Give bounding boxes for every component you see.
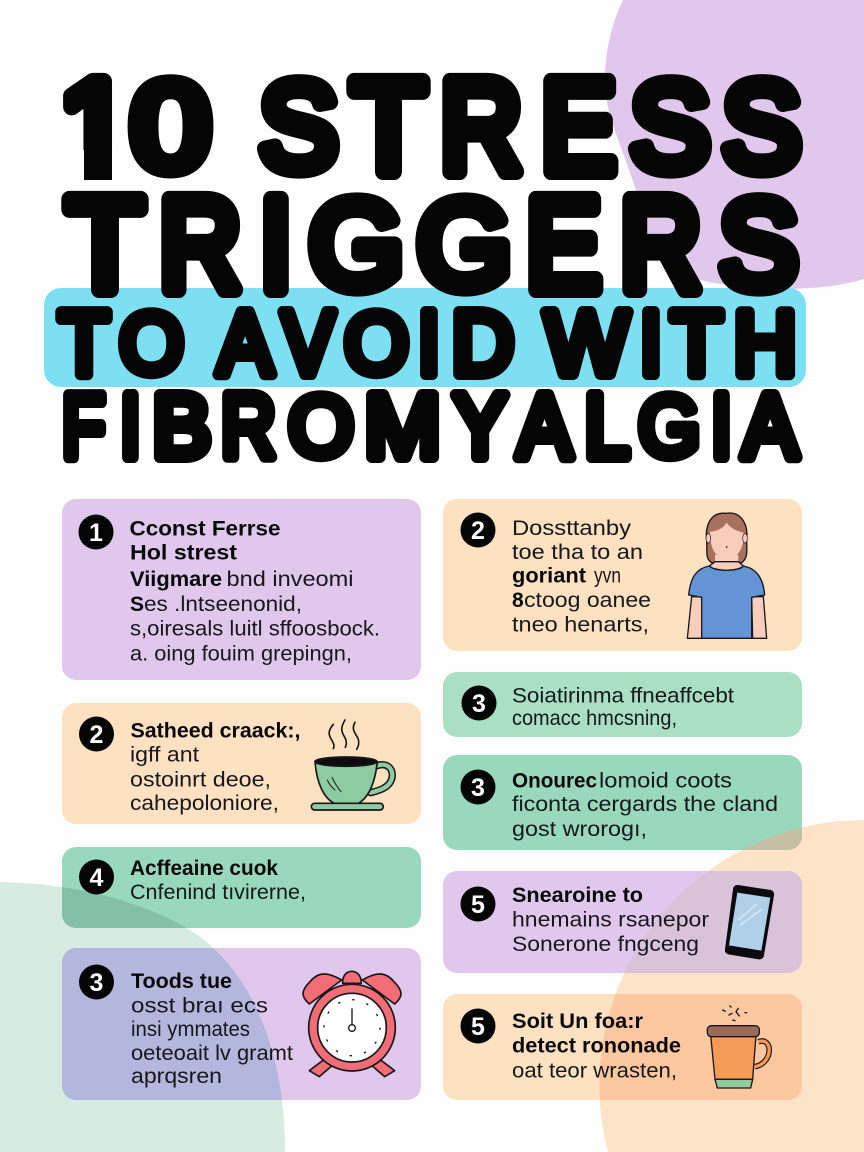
icon: steaming cup [311,720,392,810]
card 1 text: S [130,593,144,616]
number badge 3: 3 [90,969,103,997]
number badge 1: 1 [89,519,103,547]
title line 2: I [260,172,292,318]
card 2 text: Satheed craack:, [130,720,300,742]
number badge 5: 5 [471,1013,485,1041]
card 5 text: Dossttanby [512,517,632,540]
panel: card 9 peach with mug [443,994,802,1100]
title line 3: O [344,295,409,391]
title line 3: T [671,293,722,394]
number badge 4: 4 [90,864,104,892]
number badge 3 [462,686,496,720]
panel: card 2 peach with cup [62,703,421,824]
panel: card 8 purple with phone [443,871,802,973]
number badge 2 [79,716,114,752]
title line 3: I [418,292,440,393]
card 8 text: Sonerone fngceng [512,933,699,956]
card 4 text: insi ymmates [131,1018,250,1041]
title line 1: S [630,57,710,196]
card 6 text [512,684,734,730]
card 1 text [130,518,380,666]
number badge 1 [78,514,114,550]
card 5 text: tneo henarts, [512,614,649,636]
card 9 text: Soit Un foa:r [512,1010,643,1033]
title line 3: I [640,292,662,393]
panel: card 6 light green [443,672,802,737]
number badge 5: 5 [471,891,485,919]
icon: orange mug [707,1006,769,1088]
title line 4: F [62,377,105,477]
title line 4: O [288,378,354,474]
title line 3: H [734,292,796,393]
card 8 text [512,884,709,956]
card 5 text [512,517,651,636]
panel: card 4 purple with clock [62,948,421,1100]
title line 1: 0 [131,57,210,196]
card 3 text [130,857,306,904]
card 1 text: Cconst Ferrse [130,518,280,540]
card 4 text [131,970,293,1088]
number badge 3 [460,770,496,804]
card 8 text: Snearoine to [512,884,643,907]
panel: card 5 peach with person [443,499,802,651]
background blob: green bottom left [0,882,285,1152]
title line 4: L [585,377,629,477]
card 6 text: comacc hmcsning, [512,707,677,730]
icon: smartphone [725,885,774,959]
title line 2: E [526,171,601,317]
card 4 text: osst braı ecs [131,994,268,1018]
title line 3 [59,292,796,394]
card 7 text [512,770,778,841]
card 7 text: lomoid coots [599,770,732,792]
title line 1: S [722,56,801,196]
title line 4: I [711,376,732,477]
card 5 text: ctoog oanee [524,589,651,612]
title line 4: B [153,376,211,476]
card 7 text: gost wrorogı, [512,818,647,841]
title line 3: O [119,295,184,391]
title [44,52,806,477]
title line 3: W [545,292,628,393]
title line 3: V [282,293,334,393]
title line 1: 1 [59,52,132,200]
background blob: peach bottom right [599,820,864,1152]
title line 4: G [638,379,700,474]
title line 3: A [218,294,273,394]
title line 4: A [743,377,798,477]
number badge 3: 3 [472,690,486,718]
title line 1: E [541,53,616,199]
icon: person [687,513,767,638]
card 5 text: 8 [512,589,524,612]
card 3 text: Cnfenind tıvirerne, [130,881,306,904]
card 7 text: ficonta cergards the cland [512,793,778,816]
title line 1: R [440,53,522,199]
title line 3: T [59,294,109,394]
card 4 text: aprqsren [131,1065,222,1088]
card 4 text: Toods tue [131,970,232,993]
title line 4 [62,376,798,477]
card 2 text: cahepoloniore, [130,792,279,815]
number badge 5 [460,1008,496,1044]
card 2 text [130,720,300,815]
card 1 text: s,oiresals luitl sffoosbock. [130,618,380,640]
panel: card 1 purple [62,499,421,680]
icon: alarm clock [303,971,401,1077]
card 3 text: Acffeaine cuok [130,857,278,880]
card 9 text: detect rononade [512,1034,681,1058]
title line 4: R [221,376,276,476]
number badge 4 [79,860,114,894]
title line 2: S [719,174,798,314]
title line 4: Y [453,377,507,477]
card 1 text: bnd inveomi [226,568,354,591]
title line 2: T [67,172,143,318]
card 1 text: es .lntseenonid, [144,593,302,616]
number badge 2: 2 [90,721,103,749]
card 5 text: goriant [512,564,586,588]
card 2 text: ostoinrt deoe, [130,768,271,792]
card 2 text: igff ant [130,744,199,766]
title line 2: R [159,171,241,317]
title line 3: D [452,292,514,393]
panel: card 7 green [443,755,802,850]
title line 2: R [620,171,701,317]
card 5 text: toe tha to an [512,541,643,564]
title line 4: I [120,376,141,477]
title line 4: A [518,377,571,477]
background blob: purple top right [605,0,864,289]
number badge 3: 3 [471,774,485,802]
card 1 text: Hol strest [130,542,237,564]
panel: card 3 green [62,847,421,928]
title line 1: S [259,56,338,196]
title line 1 [48,52,801,200]
number badge 2 [460,512,496,548]
title line 2: G [417,176,512,315]
title line 4: M [365,376,441,477]
title line 2: G [309,176,404,315]
card 6 text: Soiatirinma ffneaffcebt [512,684,734,708]
card 1 text: a. oing fouim grepingn, [130,642,352,666]
number badge 2: 2 [471,517,485,545]
card 9 text: oat teor wrasten, [512,1060,677,1082]
title line 1: T [351,53,426,200]
title line 2 [67,171,798,318]
number badge 5 [460,886,496,922]
number badge 3 [79,964,114,1000]
card 4 text: oeteoait lv gramt [131,1042,293,1065]
card 5 text: yvn [594,564,621,588]
card 1 text: Viigmare [130,568,222,591]
title highlight bar [44,288,806,387]
card 8 text: hnemains rsanepor [512,908,709,932]
card 9 text [512,1010,681,1082]
card 7 text: Onourec [512,770,597,792]
